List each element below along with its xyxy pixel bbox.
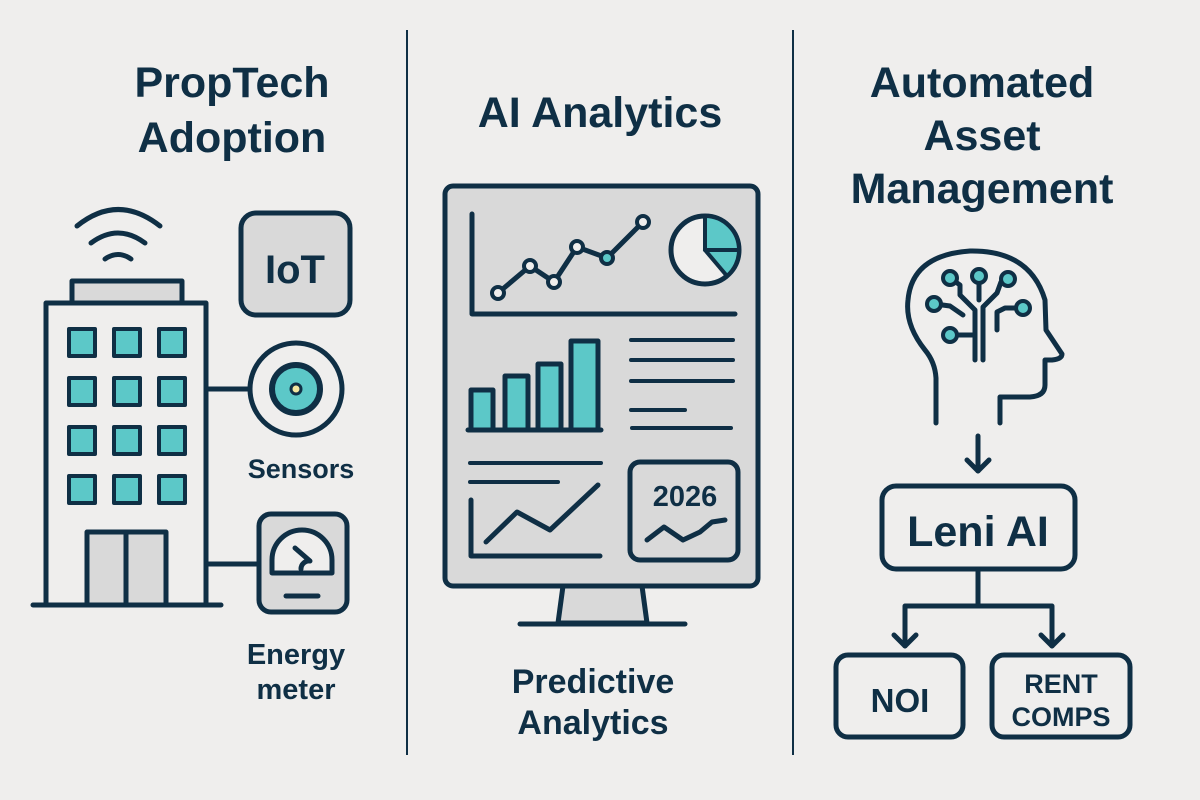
box: Leni AI: [882, 486, 1075, 569]
arrows: branch: [894, 569, 1063, 646]
box: RENT COMPS: RENT: [1024, 669, 1098, 699]
panel: AI Analytics: [445, 89, 758, 742]
icon: monitor: [445, 186, 758, 624]
label: Predictive Analytics: Predictive: [512, 663, 674, 701]
icon: IoT box: IoT: [265, 248, 325, 292]
arrow: head to Leni AI: [967, 436, 989, 471]
icon: building: [33, 281, 221, 605]
2026 box: [630, 462, 738, 560]
label: Energy meter: Energy: [247, 639, 345, 671]
pie chart: [671, 216, 739, 284]
box: RENT COMPS: COMPS: [1011, 702, 1111, 732]
title: PropTech Adoption: [134, 59, 330, 162]
title: AI Analytics: AI Analytics: [478, 89, 722, 137]
label: Energy meter: meter: [256, 674, 336, 706]
bar chart: [468, 341, 601, 430]
title: PropTech Adoption: Adoption: [138, 114, 326, 162]
text lines: [470, 340, 733, 482]
trend chart: [471, 485, 600, 556]
line chart: [472, 214, 735, 314]
box: Leni AI: Leni AI: [907, 508, 1049, 556]
icon: wifi: [77, 210, 160, 259]
title: PropTech Adoption: PropTech: [134, 59, 330, 107]
box: RENT COMPS: [992, 655, 1130, 737]
box: NOI: [836, 655, 963, 737]
label: Energy meter: [247, 639, 345, 706]
title: Automated Asset Management: Automated: [870, 59, 1094, 107]
label: Predictive Analytics: [512, 663, 674, 742]
panel: PropTech Adoption: [33, 59, 354, 706]
icon: AI head: [908, 251, 1062, 423]
label: Sensors: Sensors: [248, 454, 354, 484]
2026 box: 2026: [653, 481, 717, 513]
icon: sensor: [207, 343, 342, 435]
label: Predictive Analytics: Analytics: [517, 704, 669, 742]
title: Automated Asset Management: [851, 59, 1113, 213]
icon: IoT box: [241, 213, 350, 315]
box: NOI: NOI: [871, 682, 929, 719]
icon: energy meter: [207, 514, 347, 612]
title: Automated Asset Management: Asset: [923, 112, 1041, 160]
title: Automated Asset Management: Management: [851, 165, 1113, 213]
panel: Automated Asset Management: [836, 59, 1130, 737]
